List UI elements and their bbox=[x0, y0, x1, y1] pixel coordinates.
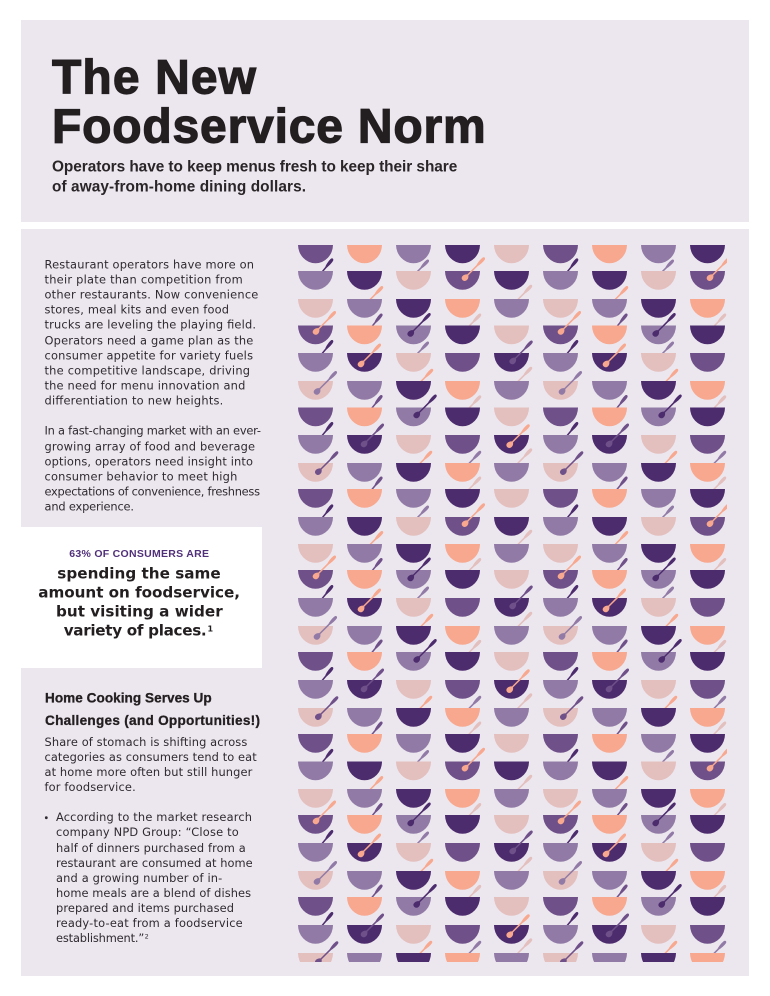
callout statement: spending the same bbox=[57, 565, 221, 583]
text block: second paragraph: In a fast-changing market with an ever- bbox=[44, 423, 261, 437]
bullet text bbox=[56, 810, 253, 945]
bullet text: 2 bbox=[145, 932, 149, 940]
text block: intro paragraph: Restaurant operators have more on bbox=[44, 257, 254, 271]
text block: second paragraph: consumer behavior to meet high bbox=[44, 469, 237, 483]
callout statement: amount on foodservice, bbox=[38, 584, 240, 602]
heading: home cooking bbox=[45, 691, 260, 728]
pattern: bowls and spoons bbox=[298, 231, 732, 972]
text block: intro paragraph bbox=[44, 257, 258, 407]
text block: second paragraph: growing array of food and beverage bbox=[44, 439, 255, 453]
subtitle bbox=[52, 158, 458, 196]
bullet text: restaurant are consumed at home bbox=[56, 856, 253, 870]
title: The New bbox=[52, 51, 257, 104]
callout statement bbox=[38, 565, 240, 640]
text block: intro paragraph: their plate than competition from bbox=[44, 272, 243, 286]
callout label: 63% OF CONSUMERS ARE bbox=[69, 548, 209, 560]
bullet text: According to the market research bbox=[56, 810, 252, 824]
callout statement: variety of places. bbox=[64, 622, 207, 640]
bullet text: establishment.” bbox=[56, 931, 144, 945]
title bbox=[52, 51, 486, 153]
text block: intro paragraph: trucks are leveling the playing field. bbox=[44, 317, 256, 331]
bullet text: prepared and items purchased bbox=[56, 901, 234, 915]
heading: home cooking: Home Cooking Serves Up bbox=[45, 691, 212, 706]
text block: second paragraph: expectations of convenience, freshness bbox=[44, 484, 260, 498]
heading: home cooking: Challenges (and Opportunities!) bbox=[45, 713, 260, 728]
text block: intro paragraph: consumer appetite for variety fuels bbox=[44, 348, 253, 362]
panel: header bbox=[21, 20, 749, 222]
text block: share of stomach bbox=[44, 735, 257, 794]
text block: intro paragraph: the competitive landscape, driving bbox=[44, 364, 250, 378]
text block: share of stomach: Share of stomach is shifting across bbox=[44, 735, 247, 749]
bullet text: half of dinners purchased from a bbox=[56, 841, 246, 855]
bullet text: home meals are a blend of dishes bbox=[56, 886, 251, 900]
subtitle: Operators have to keep menus fresh to keep their share bbox=[52, 158, 458, 176]
text block: intro paragraph: the need for menu innovation and bbox=[44, 378, 245, 392]
bullet text: ready-to-eat from a foodservice bbox=[56, 916, 243, 930]
text block: second paragraph: options, operators need insight into bbox=[44, 454, 253, 468]
panel: main content bbox=[21, 229, 749, 976]
text block: intro paragraph: stores, meal kits and even food bbox=[44, 302, 229, 316]
title: Foodservice Norm bbox=[52, 100, 486, 153]
callout: 63% of consumers bbox=[21, 527, 262, 668]
text block: second paragraph: and experience. bbox=[44, 499, 134, 513]
callout statement: but visiting a wider bbox=[56, 603, 223, 621]
text block: share of stomach: for foodservice. bbox=[44, 780, 136, 794]
text block: intro paragraph: differentiation to new heights. bbox=[44, 393, 223, 407]
bullet text: company NPD Group: “Close to bbox=[56, 825, 239, 839]
callout statement: 1 bbox=[208, 624, 214, 634]
bullet: NPD Group quote bbox=[45, 810, 253, 945]
text block: intro paragraph: other restaurants. Now convenience bbox=[44, 287, 258, 301]
bullet marker bbox=[45, 816, 48, 819]
text block: share of stomach: categories as consumers tend to eat bbox=[44, 750, 257, 764]
text block: intro paragraph: Operators need a game plan as the bbox=[44, 334, 253, 348]
subtitle: of away-from-home dining dollars. bbox=[52, 178, 306, 196]
bullet text: and a growing number of in- bbox=[56, 871, 222, 885]
text block: share of stomach: at home more often but still hunger bbox=[44, 765, 253, 779]
text block: second paragraph bbox=[44, 423, 261, 513]
